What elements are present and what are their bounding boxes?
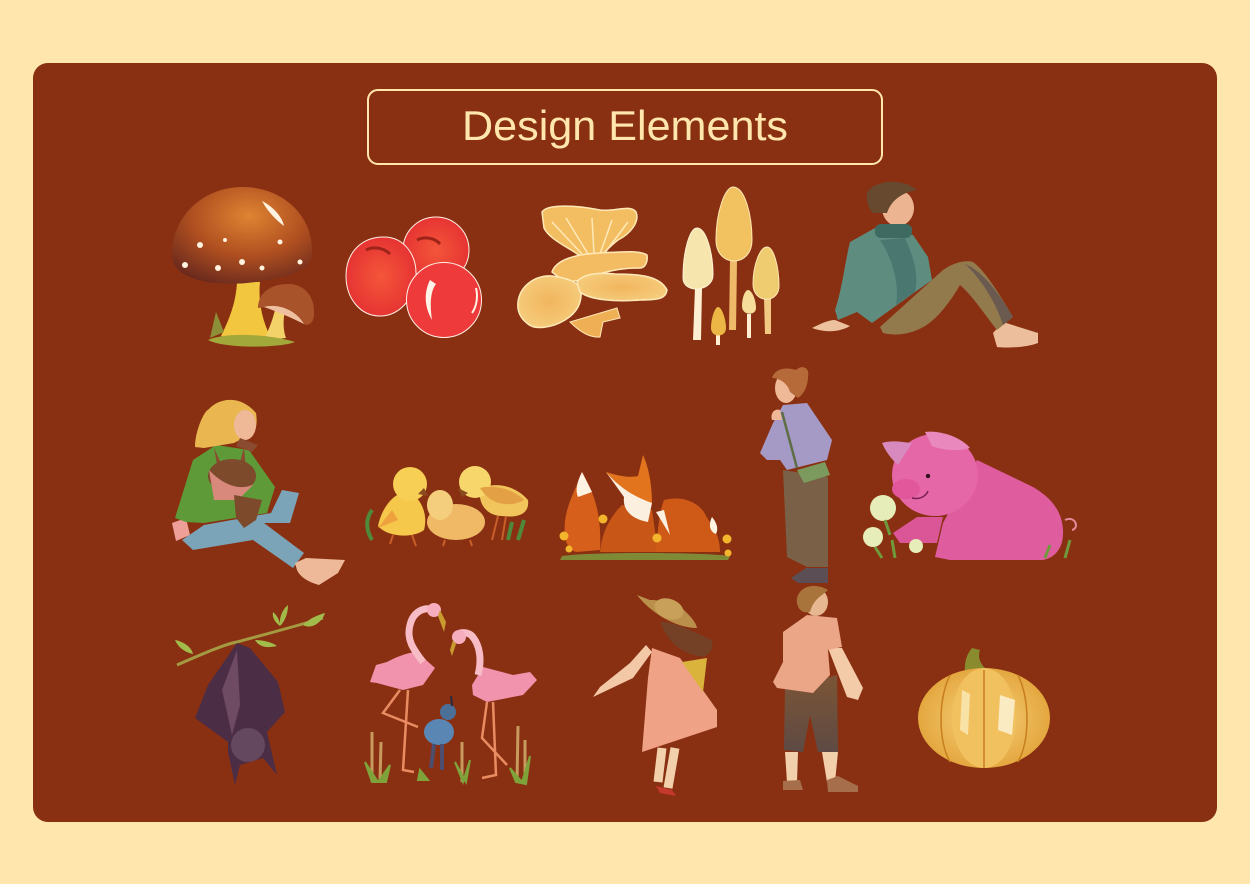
icon: woman in peach dress with hat bbox=[593, 594, 717, 796]
icon: standing woman in purple sweater bbox=[760, 367, 832, 583]
title box: Design Elements bbox=[462, 102, 788, 149]
icon: man with backpack bbox=[773, 586, 863, 792]
icon: hanging bat bbox=[175, 605, 325, 785]
icon: three yellow chicks bbox=[367, 466, 528, 546]
icon: large mushroom bbox=[172, 187, 314, 347]
icon: seated man in green sweater bbox=[812, 182, 1038, 348]
icon: tall thin mushrooms bbox=[683, 187, 779, 345]
icon: oyster mushrooms bbox=[518, 206, 667, 337]
icon: pumpkin bbox=[918, 648, 1050, 768]
icon: red apples bbox=[346, 217, 482, 338]
icon: flamingos bbox=[365, 603, 537, 784]
icon: fox family bbox=[560, 455, 732, 560]
title box bbox=[368, 90, 882, 164]
icon: seated woman with teddy bear bbox=[172, 400, 345, 585]
icon: pink pig bbox=[863, 432, 1076, 560]
